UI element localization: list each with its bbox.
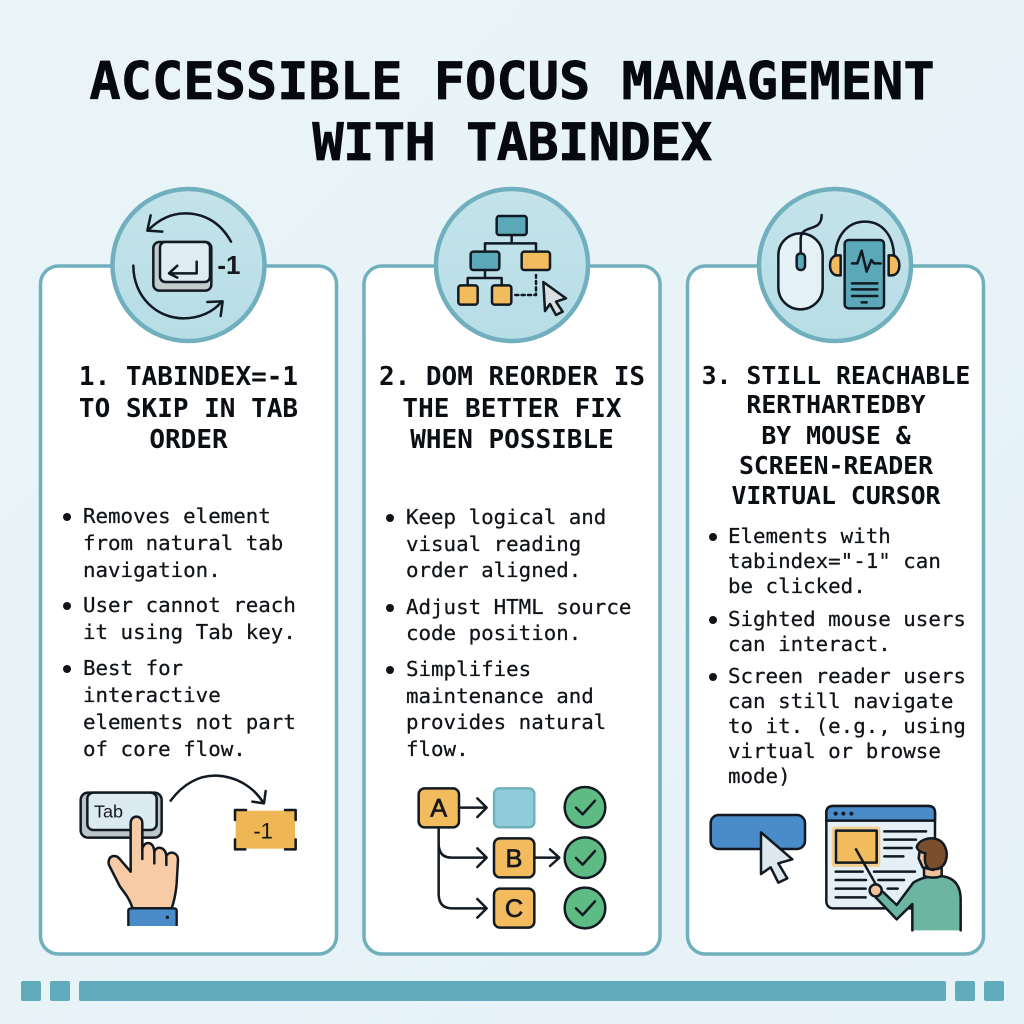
bullet list: navigation. [83, 558, 221, 582]
bullet list: order aligned. [406, 558, 581, 582]
bullet list: Screen reader users [728, 664, 966, 688]
icon: mouse and screen reader phone [759, 189, 911, 341]
illustration: button click and virtual cursor [711, 806, 961, 930]
illustration: finger pressing tab key: -1 [253, 819, 273, 844]
bullet list: tabindex="-1" can [728, 549, 941, 573]
heading: TO SKIP IN TAB [79, 394, 298, 424]
bullet list: can still navigate [728, 689, 953, 713]
title: WITH TABINDEX [312, 113, 712, 173]
illustration: finger pressing tab key: Tab [94, 802, 123, 822]
heading [79, 362, 298, 455]
bullet list: Keep logical and [406, 505, 606, 529]
bullet list: Sighted mouse users [728, 607, 966, 631]
heading: 3. STILL REACHABLE [702, 361, 970, 390]
illustration: reordered A B C flow: A [430, 795, 447, 823]
bullet list: can interact. [728, 632, 891, 656]
heading: RERTHARTEDBY [746, 390, 926, 419]
bullet list: to it. (e.g., using [728, 714, 966, 738]
heading: BY MOUSE & [761, 421, 911, 450]
bullet list: Best for [83, 656, 183, 680]
heading: WHEN POSSIBLE [410, 425, 614, 455]
bullet list: Elements with [728, 524, 891, 548]
heading [379, 362, 645, 455]
bullet list: code position. [406, 621, 581, 645]
illustration: reordered A B C flow: C [505, 895, 523, 923]
bullet list: Simplifies [406, 657, 531, 681]
bullet list: of core flow. [83, 737, 246, 761]
bullet list: flow. [406, 737, 469, 761]
panel: tabindex -1 [40, 189, 336, 954]
panel: DOM reorder [364, 189, 660, 954]
illustration: finger pressing tab key [81, 776, 296, 926]
bullet list: elements not part [83, 710, 296, 734]
title [89, 52, 935, 173]
bullet list: Removes element [83, 504, 271, 528]
title: ACCESSIBLE FOCUS MANAGEMENT [89, 52, 935, 112]
icon: DOM tree with cursor [436, 189, 588, 341]
bullet list [709, 524, 966, 788]
footer bar [21, 981, 1004, 1001]
heading: 2. DOM REORDER IS [379, 362, 645, 392]
bullet list [386, 505, 631, 761]
bullet list: maintenance and [406, 684, 594, 708]
panel: still reachable [688, 189, 984, 954]
bullet list: virtual or browse [728, 739, 941, 763]
illustration: reordered A B C flow [419, 787, 605, 928]
bullet list: interactive [83, 683, 221, 707]
bullet list: User cannot reach [83, 593, 296, 617]
heading: 1. TABINDEX=-1 [79, 362, 298, 392]
heading: ORDER [149, 425, 228, 455]
bullet list: from natural tab [83, 531, 283, 555]
bullet list: visual reading [406, 532, 581, 556]
icon: tab key with cycle arrows: -1 [217, 250, 240, 280]
bullet list: provides natural [406, 710, 606, 734]
heading: SCREEN-READER [739, 451, 933, 480]
heading: THE BETTER FIX [402, 394, 622, 424]
bullet list: mode) [728, 764, 791, 788]
bullet list: it using Tab key. [83, 620, 296, 644]
heading: VIRTUAL CURSOR [731, 481, 941, 510]
illustration: reordered A B C flow: B [506, 845, 522, 873]
bullet list: be clicked. [728, 574, 866, 598]
bullet list [63, 504, 296, 761]
bullet list: Adjust HTML source [406, 595, 631, 619]
heading [702, 361, 970, 510]
icon: tab key with cycle arrows [112, 189, 264, 341]
